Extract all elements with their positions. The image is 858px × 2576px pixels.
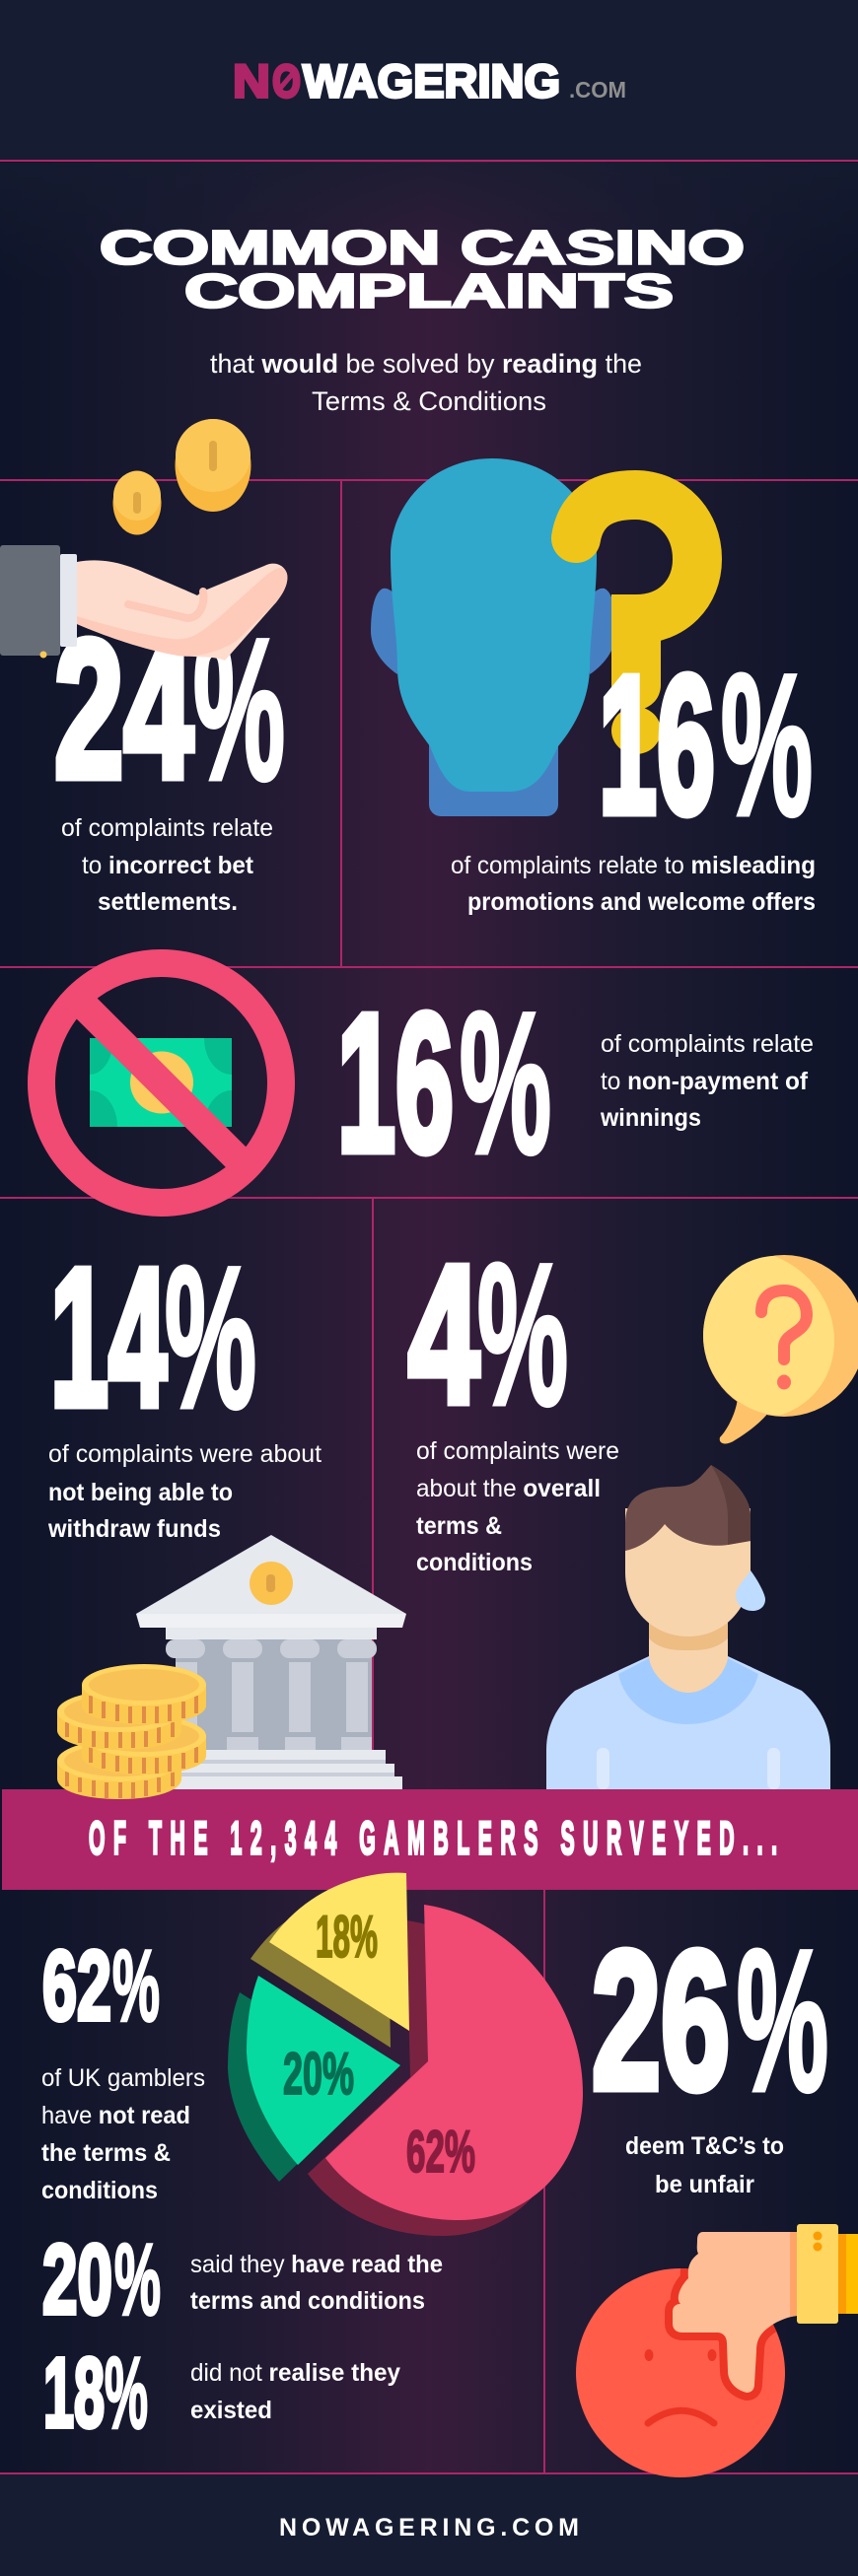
stat: 62%: 62: [42, 1930, 111, 2041]
stat: 14%: %: [165, 1225, 256, 1450]
coin 1: [82, 1664, 206, 1724]
icon: sad face with thumbs down: [576, 2224, 858, 2477]
coin 4: [57, 1740, 181, 1799]
icon: falling coins: [112, 419, 250, 534]
stat: 4%: %: [477, 1222, 568, 1447]
caption: of UK gamblers: [41, 2064, 205, 2092]
slice: 62%: [308, 1905, 583, 2236]
caption: promotions and welcome offers: [467, 888, 816, 916]
caption: to incorrect bet: [82, 852, 254, 879]
logo: O: [272, 55, 301, 106]
subtitle: Terms & Conditions: [312, 386, 546, 416]
caption: conditions: [41, 2177, 158, 2204]
logo: [233, 55, 626, 106]
caption: [190, 2359, 400, 2424]
footer: [0, 2474, 858, 2576]
panel: incorrect bet settlements: [0, 419, 287, 916]
caption: settlements.: [98, 888, 238, 916]
stat: 4%: 4: [408, 1225, 479, 1444]
stat: 18%: 18: [43, 2338, 105, 2449]
stat: 20%: %: [114, 2222, 161, 2336]
caption: [61, 814, 273, 916]
panel: misleading promotions: [371, 458, 816, 916]
subtitle: [210, 349, 642, 416]
caption: of complaints relate to misleading: [451, 852, 816, 879]
caption: [190, 2251, 443, 2315]
caption: be unfair: [655, 2171, 754, 2198]
slice: 20%: 20%: [283, 2041, 354, 2107]
logo: N: [233, 55, 270, 106]
panel: unfair terms: [576, 1909, 858, 2477]
caption: deem T&C’s to: [625, 2132, 784, 2160]
caption: to non-payment of: [601, 1068, 809, 1095]
logo: .COM: [569, 77, 626, 103]
slice: 20%: [228, 1976, 400, 2182]
caption: [416, 1437, 619, 1576]
icon: bank building: [136, 1535, 406, 1789]
caption: terms &: [416, 1512, 502, 1540]
caption: withdraw funds: [47, 1515, 221, 1543]
icon: open hand with cuff: [0, 545, 287, 661]
coin 3: [82, 1715, 206, 1775]
caption: [41, 2064, 205, 2204]
slice: 62%: 62%: [406, 2119, 475, 2185]
caption: conditions: [416, 1549, 533, 1576]
caption: terms and conditions: [190, 2287, 425, 2315]
stat: 16%: 16: [599, 636, 715, 855]
stat: 26%: 26: [592, 1912, 730, 2130]
title: [100, 223, 745, 317]
icon: head with question mark: [371, 458, 697, 816]
icon: worried person: [546, 1465, 830, 1789]
caption: not being able to: [48, 1479, 233, 1506]
slice: 18%: 18%: [316, 1904, 378, 1970]
stat: 62%: %: [112, 1928, 160, 2043]
caption: [451, 852, 816, 916]
caption: have not read: [41, 2102, 190, 2129]
panel: unable to withdraw funds: [47, 1225, 406, 1789]
footer: NOWAGERING.COM: [279, 2514, 579, 2541]
icon: question speech bubble: [703, 1255, 858, 1443]
stat: 14%: 14: [50, 1228, 167, 1447]
caption: [600, 1030, 814, 1132]
title: COMMON CASINO: [100, 223, 745, 274]
subtitle: that would be solved by reading the: [210, 349, 642, 379]
panel: overall terms and conditions: [408, 1222, 858, 1789]
caption: [47, 1440, 322, 1543]
caption: [625, 2132, 784, 2198]
banner: [2, 1789, 858, 1890]
stat: 24%: %: [193, 597, 285, 822]
slice: 18%: [250, 1873, 409, 2048]
panel: non-payment of winnings: [41, 963, 814, 1203]
caption: of complaints relate: [601, 1030, 814, 1058]
stat: 24%: 24: [54, 600, 193, 819]
icon: banknote with prohibition sign: [41, 963, 281, 1203]
caption: did not realise they: [190, 2359, 400, 2387]
caption: about the overall: [416, 1475, 601, 1502]
icon: gold coin stack: [57, 1664, 206, 1799]
banner: OF THE 12,344 GAMBLERS SURVEYED...: [89, 1812, 777, 1864]
caption: of complaints were about: [48, 1440, 322, 1468]
caption: of complaints were: [416, 1437, 619, 1465]
logo: WAGERING: [303, 55, 560, 106]
title: COMPLAINTS: [184, 266, 674, 317]
pie chart: [228, 1873, 583, 2236]
panel: survey breakdown: [41, 1873, 583, 2449]
stat: 4%: [408, 1222, 568, 1447]
panel: survey breakdown: %: [105, 2336, 148, 2449]
caption: said they have read the: [190, 2251, 443, 2278]
stat: 16%: %: [460, 971, 551, 1196]
caption: winnings: [600, 1104, 701, 1132]
caption: existed: [190, 2397, 272, 2424]
coin 2: [57, 1691, 181, 1750]
stat: 16%: 16: [337, 974, 454, 1193]
caption: the terms &: [41, 2139, 171, 2167]
stat: 20%: 20: [42, 2224, 112, 2334]
caption: of complaints relate: [61, 814, 273, 842]
